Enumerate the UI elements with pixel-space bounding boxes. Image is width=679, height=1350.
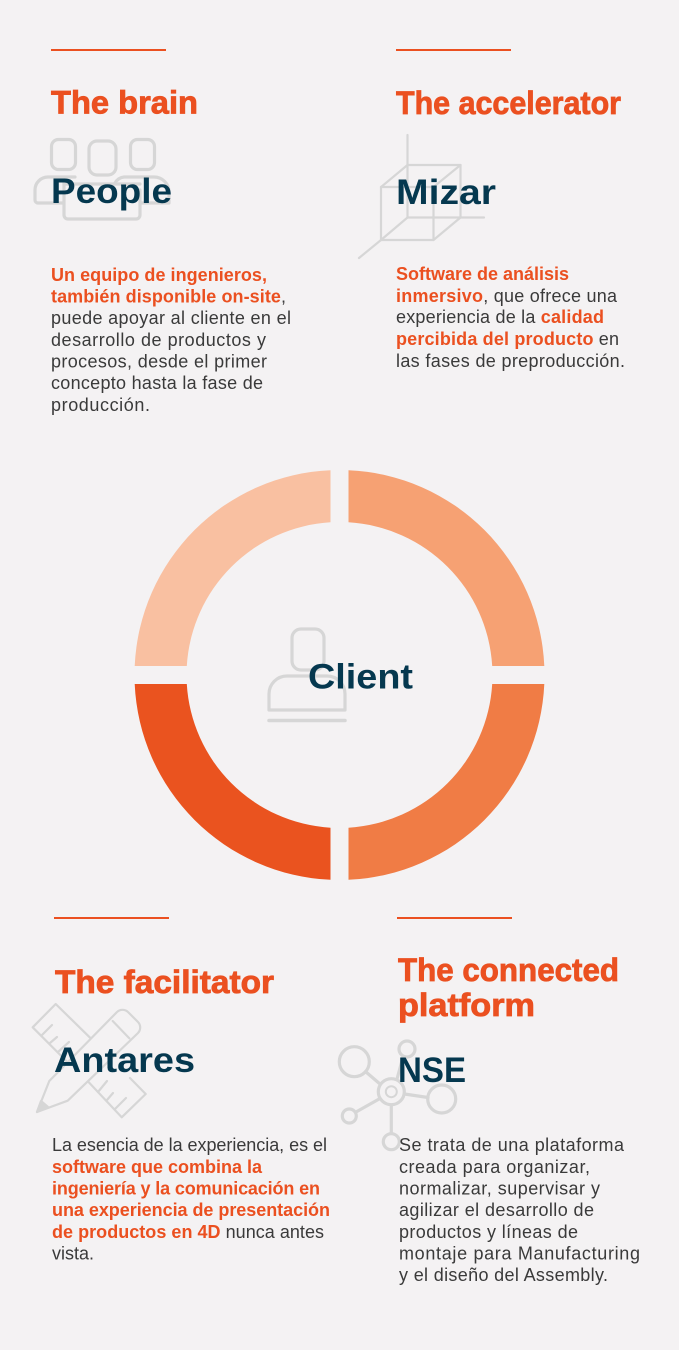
text block: nse description: montaje para Manufacturing xyxy=(399,1244,640,1264)
text block: mizar description: las fases de preproducción. xyxy=(396,351,625,371)
heading: The accelerator: The accelerator xyxy=(396,85,621,121)
text block: nse description: productos y líneas de xyxy=(399,1222,578,1242)
panel: the accelerator xyxy=(359,50,625,371)
label: Client: Client xyxy=(308,658,413,696)
segment: top right xyxy=(348,470,544,666)
icon: client person xyxy=(269,629,345,720)
text block: nse description: creada para organizar, xyxy=(399,1157,590,1177)
text block: nse description xyxy=(399,1135,640,1285)
text block: nse description: y el diseño del Assembly. xyxy=(399,1265,608,1285)
heading: The connected platform: The connected xyxy=(398,952,619,988)
text block: nse description: Se trata de una plataforma xyxy=(399,1135,625,1155)
text block: antares description: una experiencia de presentación xyxy=(52,1200,330,1220)
text block: mizar description: percibida del producto en xyxy=(396,329,619,349)
chart: donut ring around client xyxy=(135,470,544,880)
text block: antares description xyxy=(52,1135,330,1264)
product name: People: People xyxy=(51,172,172,211)
text block: people description: desarrollo de productos y xyxy=(51,330,266,350)
text block: people description xyxy=(51,265,291,415)
heading: The brain: The brain xyxy=(51,84,198,120)
text block: people description: producción. xyxy=(51,395,150,415)
text block: people description: puede apoyar al cliente en el xyxy=(51,308,291,328)
text block: antares description: La esencia de la experiencia, es el xyxy=(52,1135,327,1155)
text block: mizar description: inmersivo, que ofrece una xyxy=(396,286,618,306)
panel: the brain xyxy=(35,50,291,415)
segment: top left xyxy=(135,470,330,666)
heading: The connected platform: platform xyxy=(398,987,535,1023)
text block: people description: Un equipo de ingenieros, xyxy=(51,265,267,285)
icon: network xyxy=(339,1041,456,1150)
product name: Mizar: Mizar xyxy=(396,173,496,212)
text block: mizar description xyxy=(396,264,625,371)
text block: people description: concepto hasta la fase de xyxy=(51,373,263,393)
product name: Antares: Antares xyxy=(54,1041,195,1080)
panel: the facilitator xyxy=(33,918,330,1264)
heading: The connected platform xyxy=(398,952,619,1023)
text block: people description: también disponible on-site, xyxy=(51,286,286,306)
icon: people xyxy=(35,140,169,219)
text block: antares description: ingeniería y la comunicación en xyxy=(52,1178,320,1198)
text block: nse description: agilizar el desarrollo de xyxy=(399,1200,594,1220)
segment: bottom right xyxy=(348,684,544,880)
text block: antares description: de productos en 4D nunca antes xyxy=(52,1222,324,1242)
icon: cube xyxy=(359,135,484,258)
panel: the connected platform xyxy=(339,918,640,1285)
text block: antares description: vista. xyxy=(52,1244,94,1264)
heading: The facilitator: The facilitator xyxy=(55,964,274,1000)
text block: mizar description: Software de análisis xyxy=(396,264,569,284)
segment: bottom left xyxy=(135,684,330,880)
text block: people description: procesos, desde el primer xyxy=(51,352,267,372)
text block: antares description: software que combina la xyxy=(52,1157,263,1177)
product name: NSE: NSE xyxy=(398,1051,466,1090)
text block: nse description: normalizar, supervisar y xyxy=(399,1178,600,1198)
icon: ruler and pencil xyxy=(33,1004,146,1117)
text block: mizar description: experiencia de la calidad xyxy=(396,307,604,327)
